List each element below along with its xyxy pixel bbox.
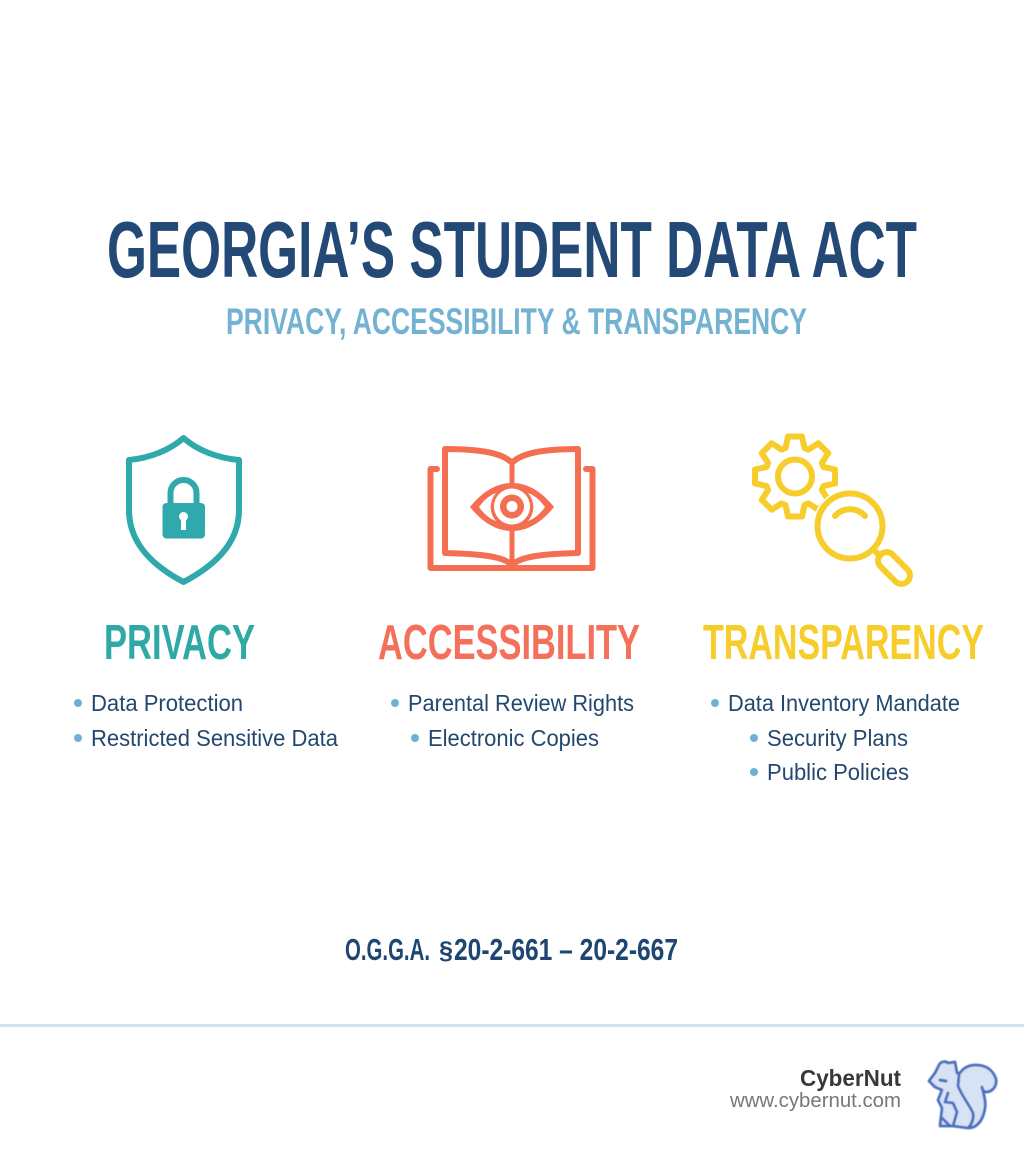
footer brand (729, 1065, 901, 1112)
panel: transparency (703, 436, 984, 785)
icon: open book with eye (430, 449, 592, 568)
list: transparency items: Security Plans (767, 725, 908, 751)
list: accessibility items: Parental Review Rights (408, 690, 634, 716)
list: transparency items: Public Policies (767, 759, 909, 785)
brand name: CyberNut (800, 1065, 901, 1091)
brand url: www.cybernut.com (729, 1090, 901, 1112)
heading: privacy: PRIVACY (104, 616, 255, 670)
icon: squirrel logo (929, 1062, 996, 1128)
legal citation: 20-2-661 – 20-2-667 (454, 932, 678, 967)
list: transparency items (711, 690, 960, 785)
legal citation (345, 932, 678, 967)
list: transparency items: Data Inventory Mandate (728, 690, 960, 716)
list: accessibility items (391, 690, 634, 751)
panel: accessibility (378, 449, 640, 751)
icon: shield with padlock (129, 438, 239, 582)
list: privacy items (74, 690, 338, 751)
heading: accessibility: ACCESSIBILITY (378, 616, 640, 670)
list: accessibility items: Electronic Copies (428, 725, 599, 751)
list: privacy items: Data Protection (91, 690, 243, 716)
list: privacy items: Restricted Sensitive Data (91, 725, 338, 751)
icon: gear and magnifying glass (755, 436, 913, 587)
subtitle: PRIVACY, ACCESSIBILITY & TRANSPARENCY (226, 301, 807, 342)
legal citation: O.G.G.A. (345, 932, 430, 967)
legal citation: § (439, 937, 453, 965)
panel: privacy (74, 438, 338, 751)
